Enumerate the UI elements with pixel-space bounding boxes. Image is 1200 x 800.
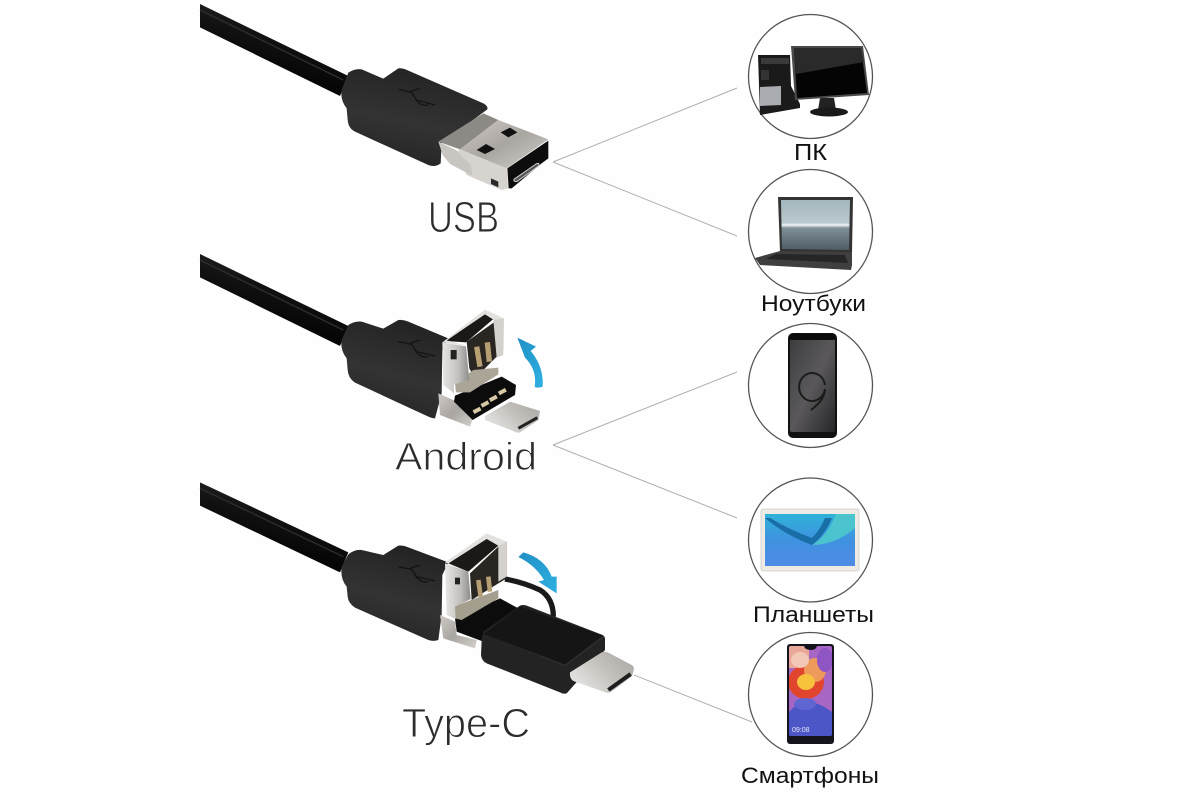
device: PC — [748, 14, 872, 138]
connector lines: USB to PC and laptop — [553, 88, 737, 236]
label: tablets: Планшеты — [753, 602, 874, 627]
device: laptop — [748, 170, 872, 294]
label: smartphones: Смартфоны — [741, 763, 879, 788]
Type-C label: Type-C — [402, 700, 530, 746]
circle: PC — [748, 14, 872, 138]
Type-C plug — [200, 482, 634, 694]
Android label: Android — [395, 436, 537, 479]
icon: tablet — [761, 509, 859, 571]
circle: phone — [748, 324, 872, 448]
arrow: rotate up — [517, 338, 543, 388]
arrow: rotate down — [518, 552, 557, 593]
icon: tower — [758, 55, 800, 115]
circle: smartphone — [748, 632, 872, 756]
icon: black phone with 9 — [788, 333, 837, 438]
connector lines: Android to phone and tablet — [553, 372, 737, 518]
icon: colourful smartphone: 09:08 — [792, 727, 810, 734]
label: PC: ПК — [794, 139, 828, 165]
icon: monitor — [791, 46, 869, 116]
icon: laptop — [755, 197, 853, 270]
device: tablet — [748, 478, 872, 602]
connector line: Type-C to smartphone — [634, 675, 752, 722]
device: smartphone — [748, 632, 872, 756]
device: phone — [748, 324, 872, 448]
USB label: USB — [428, 193, 499, 242]
USB plug — [200, 4, 548, 190]
Android plug — [200, 254, 540, 433]
label: laptops: Ноутбуки — [761, 291, 866, 316]
circle: tablet — [748, 478, 872, 602]
circle: laptop — [748, 170, 872, 294]
